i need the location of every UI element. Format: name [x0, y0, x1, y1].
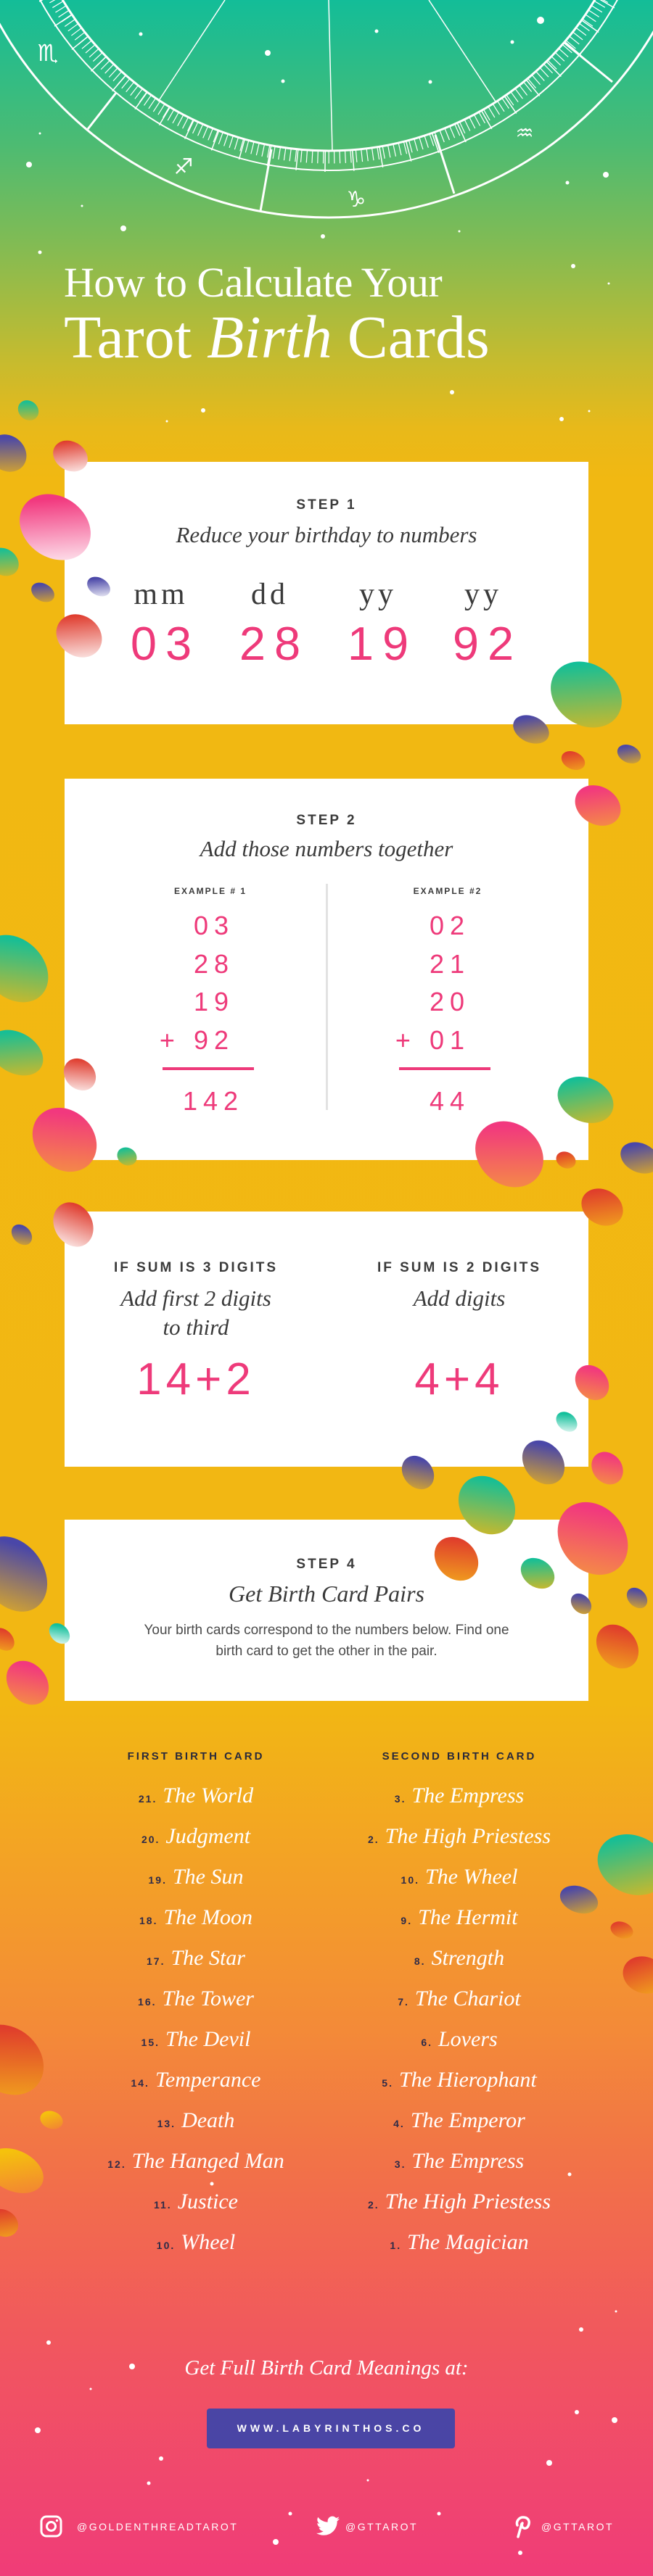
column: 3 digits: to third: [163, 1314, 229, 1340]
list: first birth card: 19. The Sun: [149, 1865, 243, 1889]
list: second birth card: 8. Strength: [414, 1946, 504, 1970]
panel: step 2: [65, 779, 588, 1160]
icon: sagittarius: ♐︎: [174, 154, 193, 180]
example 2: [395, 886, 490, 1116]
call to action text: Get Full Birth Card Meanings at:: [184, 2356, 469, 2380]
list: second birth card: 6. Lovers: [421, 2027, 498, 2051]
list: first birth card: 13. Death: [157, 2108, 234, 2132]
example 2: 20: [430, 987, 470, 1016]
list: first birth card: 21. The World: [139, 1784, 253, 1807]
example 2: EXAMPLE #2: [414, 886, 482, 896]
date format labels: [134, 578, 502, 611]
column: 2 digits: Add digits: [414, 1285, 505, 1311]
list: first birth card: [107, 1750, 284, 2254]
zodiac wheel: [0, 0, 653, 219]
list: second birth card: 10. The Wheel: [401, 1865, 517, 1889]
example 2: 21: [430, 949, 470, 979]
footer: twitter: [316, 2516, 418, 2535]
panel: step 3: [65, 1212, 588, 1467]
date format labels: yy: [464, 578, 502, 611]
panel: step 1: [65, 462, 588, 724]
list: second birth card: 3. The Empress: [395, 1784, 524, 1807]
date format labels: yy: [359, 578, 397, 611]
example 1: 142: [183, 1086, 244, 1116]
list: second birth card: 2. The High Priestess: [368, 1824, 551, 1848]
icon: instagram: [41, 2516, 62, 2538]
icon: pinterest: [515, 2516, 530, 2538]
list: first birth card: 12. The Hanged Man: [107, 2149, 284, 2173]
date numbers: [131, 617, 522, 670]
column: 2 digits: IF SUM IS 2 DIGITS: [377, 1260, 541, 1275]
list: second birth card: 1. The Magician: [390, 2230, 529, 2254]
example 1: 03: [194, 911, 234, 940]
title: [64, 259, 490, 371]
date numbers: 19: [348, 617, 417, 670]
divider: [326, 884, 328, 1110]
example 2: 02: [430, 911, 470, 940]
column: 3 digits: [114, 1260, 278, 1404]
list: first birth card: 17. The Star: [147, 1946, 245, 1970]
list: second birth card: 4. The Emperor: [393, 2108, 525, 2132]
date format labels: mm: [134, 578, 189, 611]
step 2 label: STEP 2: [296, 813, 357, 828]
date numbers: 03: [131, 617, 200, 670]
column: 2 digits: [377, 1260, 541, 1404]
example 1: 19: [194, 987, 234, 1016]
icon: scorpio: ♏︎: [38, 39, 58, 67]
example 1: EXAMPLE # 1: [174, 886, 247, 896]
list: first birth card: 11. Justice: [154, 2190, 238, 2213]
list: second birth card: 3. The Empress: [395, 2149, 524, 2173]
list: first birth card: 15. The Devil: [141, 2027, 250, 2051]
icon: twitter: [316, 2516, 340, 2535]
date format labels: dd: [251, 578, 289, 611]
step 1 subtitle: Reduce your birthday to numbers: [176, 522, 477, 547]
date numbers: 92: [453, 617, 522, 670]
button: website: WWW.LABYRINTHOS.CO: [237, 2422, 424, 2434]
list: first birth card: FIRST BIRTH CARD: [128, 1750, 264, 1763]
list: second birth card: 9. The Hermit: [401, 1905, 518, 1929]
list: first birth card: 16. The Tower: [138, 1987, 254, 2010]
step 4 label: STEP 4: [296, 1557, 357, 1572]
column: 3 digits: Add first 2 digits: [120, 1285, 271, 1311]
footer: pinterest: @GTTAROT: [541, 2521, 614, 2532]
footer: pinterest: [515, 2516, 614, 2538]
title: Tarot Birth Cards: [64, 304, 490, 371]
list: second birth card: 7. The Chariot: [398, 1987, 521, 2010]
step 2 subtitle: Add those numbers together: [200, 836, 453, 861]
title: How to Calculate Your: [64, 259, 442, 306]
step 1 label: STEP 1: [296, 497, 357, 513]
footer: twitter: @GTTAROT: [345, 2521, 418, 2532]
example 2: + 01: [395, 1025, 470, 1055]
button: website: [207, 2409, 455, 2448]
list: first birth card: 14. Temperance: [131, 2068, 261, 2092]
list: second birth card: 5. The Hierophant: [382, 2068, 537, 2092]
column: 2 digits: 4+4: [414, 1354, 504, 1404]
list: second birth card: [368, 1750, 551, 2254]
panel: step 4: [65, 1520, 588, 1701]
step 4 body: Your birth cards correspond to the numbers below. Find one birth card to get the other in the pair.: [144, 1623, 509, 1659]
footer: instagram: @GOLDENTHREADTAROT: [77, 2521, 238, 2532]
column: 3 digits: IF SUM IS 3 DIGITS: [114, 1260, 278, 1275]
list: second birth card: SECOND BIRTH CARD: [382, 1750, 536, 1763]
example 1: 28: [194, 949, 234, 979]
column: 3 digits: 14+2: [136, 1354, 255, 1404]
example 2: 44: [430, 1086, 470, 1116]
list: first birth card: 20. Judgment: [141, 1824, 250, 1848]
example 1: [160, 886, 254, 1116]
step 4 subtitle: Get Birth Card Pairs: [229, 1581, 424, 1607]
icon: aquarius: ♒︎: [515, 121, 534, 145]
footer: instagram: [41, 2516, 238, 2538]
list: first birth card: 10. Wheel: [157, 2230, 235, 2254]
icon: capricorn: ♑︎: [347, 187, 366, 212]
example 1: + 92: [160, 1025, 234, 1055]
date numbers: 28: [239, 617, 309, 670]
list: first birth card: 18. The Moon: [139, 1905, 252, 1929]
list: second birth card: 2. The High Priestess: [368, 2190, 551, 2213]
